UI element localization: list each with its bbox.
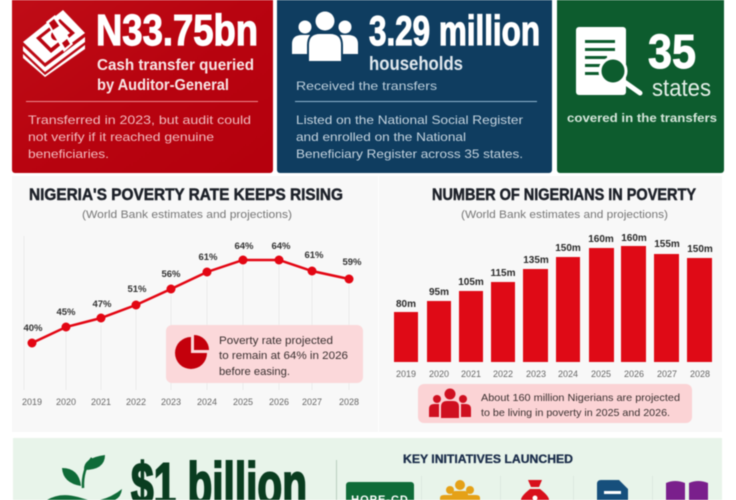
- text: cash transfer body: beneficiaries.: [28, 147, 109, 161]
- line chart: 2025: [233, 397, 253, 407]
- line chart: 2023: [161, 397, 181, 407]
- bar chart: 2025: [591, 369, 611, 379]
- text: households: households: [369, 54, 463, 75]
- panel: number in poverty bar chart: [379, 176, 722, 432]
- text: bar chart subtitle: (World Bank estimates and projections): [461, 209, 668, 221]
- text: households body: [296, 113, 523, 161]
- text: received the transfers: Received the transfers: [296, 79, 437, 93]
- bar chart: 155m: [654, 239, 680, 250]
- text: cash transfer body: not verify if it reached genuine: [28, 130, 214, 144]
- line chart: 2021: [91, 397, 111, 407]
- callout: poverty rate: Poverty rate projected: [219, 335, 333, 347]
- text: cash transfer subtitle: [97, 57, 254, 94]
- line chart: [22, 236, 362, 407]
- line chart: 2022: [126, 397, 146, 407]
- line chart: 2019: [22, 397, 42, 407]
- initiative: HOPE-CD: [346, 482, 414, 500]
- heading: 3.29 million: 3.29 million: [369, 7, 540, 54]
- heading: key initiatives: KEY INITIATIVES LAUNCHED: [403, 452, 573, 466]
- text: cash transfer subtitle: by Auditor-General: [97, 77, 229, 94]
- bar chart: 2027: [657, 369, 677, 379]
- bar chart: 2026: [624, 369, 644, 379]
- line chart: 56%: [161, 269, 181, 280]
- text: cash transfer body: Transferred in 2023, but audit could: [28, 113, 251, 127]
- callout: poverty rate: to remain at 64% in 2026: [219, 350, 348, 362]
- callout: 160 million: to be living in poverty in 2025 and 2026.: [481, 407, 670, 419]
- text: households body: Listed on the National Social Register: [296, 113, 523, 127]
- bar chart: 2024: [558, 369, 578, 379]
- icon: people red: [429, 388, 471, 418]
- bar chart: 160m: [621, 233, 647, 244]
- panel: cash transfer: [12, 0, 273, 173]
- text: line chart subtitle: (World Bank estimates and projections): [82, 209, 292, 221]
- bar chart: 2023: [526, 369, 546, 379]
- heading: number of Nigerians: NUMBER OF NIGERIANS IN POVERTY: [432, 185, 697, 204]
- bar chart: [394, 233, 713, 379]
- bar chart: 150m: [555, 243, 581, 254]
- icon: document with magnifier: [576, 27, 640, 95]
- bar chart: 2019: [396, 369, 416, 379]
- bar chart: 150m: [687, 244, 713, 255]
- text: covered in the transfers: covered in the transfers: [567, 111, 717, 125]
- text: cash transfer subtitle: Cash transfer queried: [97, 57, 254, 74]
- line chart: 47%: [92, 299, 112, 310]
- icon: purple book: [666, 481, 708, 500]
- icon: navy document: [597, 480, 628, 500]
- line chart: 61%: [198, 252, 218, 263]
- bar chart: 2028: [690, 369, 710, 379]
- bar chart: 115m: [490, 268, 516, 279]
- bar chart: 2020: [429, 369, 449, 379]
- text: households body: and enrolled on the National: [296, 130, 466, 144]
- heading: N33.75bn: N33.75bn: [96, 6, 258, 55]
- line chart: 2028: [339, 397, 359, 407]
- panel: states: [557, 0, 724, 173]
- line chart: 64%: [271, 241, 291, 252]
- line chart: 2024: [197, 397, 217, 407]
- panel: poverty rate line chart: [12, 176, 378, 432]
- line chart: 2020: [56, 397, 76, 407]
- line chart: 59%: [342, 257, 362, 268]
- bar chart: 80m: [396, 299, 416, 310]
- bar chart: 95m: [429, 287, 449, 298]
- text: cash transfer body: [28, 113, 251, 161]
- panel: households: [277, 0, 552, 173]
- bar chart: 2021: [461, 369, 481, 379]
- icon: plant in hand: [47, 455, 122, 500]
- icon: people: [292, 12, 358, 61]
- text: states: states: [652, 75, 711, 102]
- icon: money stack: [23, 5, 85, 77]
- callout: 160 million: [418, 384, 692, 423]
- heading: poverty rate: NIGERIA'S POVERTY RATE KEEPS RISING: [29, 185, 343, 204]
- panel: $1 billion and key initiatives: [13, 438, 722, 500]
- line chart: 40%: [23, 323, 43, 334]
- icon: pie chart: [175, 335, 209, 369]
- bar chart: 135m: [523, 255, 549, 266]
- bar chart: 105m: [458, 277, 484, 288]
- callout: poverty rate: [166, 325, 363, 383]
- bar chart: 2022: [493, 369, 513, 379]
- icon: red money bag: [521, 480, 549, 500]
- heading: 35: 35: [648, 26, 696, 79]
- bar chart: 160m: [588, 234, 614, 245]
- line chart: 64%: [234, 241, 254, 252]
- line chart: 2027: [302, 397, 322, 407]
- icon: orange people: [440, 480, 480, 500]
- line chart: 61%: [304, 250, 324, 261]
- line chart: 2026: [269, 397, 289, 407]
- line chart: 45%: [56, 307, 76, 318]
- callout: 160 million: About 160 million Nigerians are projected: [481, 392, 680, 404]
- callout: poverty rate: before easing.: [219, 366, 290, 378]
- line chart: 51%: [127, 284, 147, 295]
- text: households body: Beneficiary Register across 35 states.: [296, 147, 523, 161]
